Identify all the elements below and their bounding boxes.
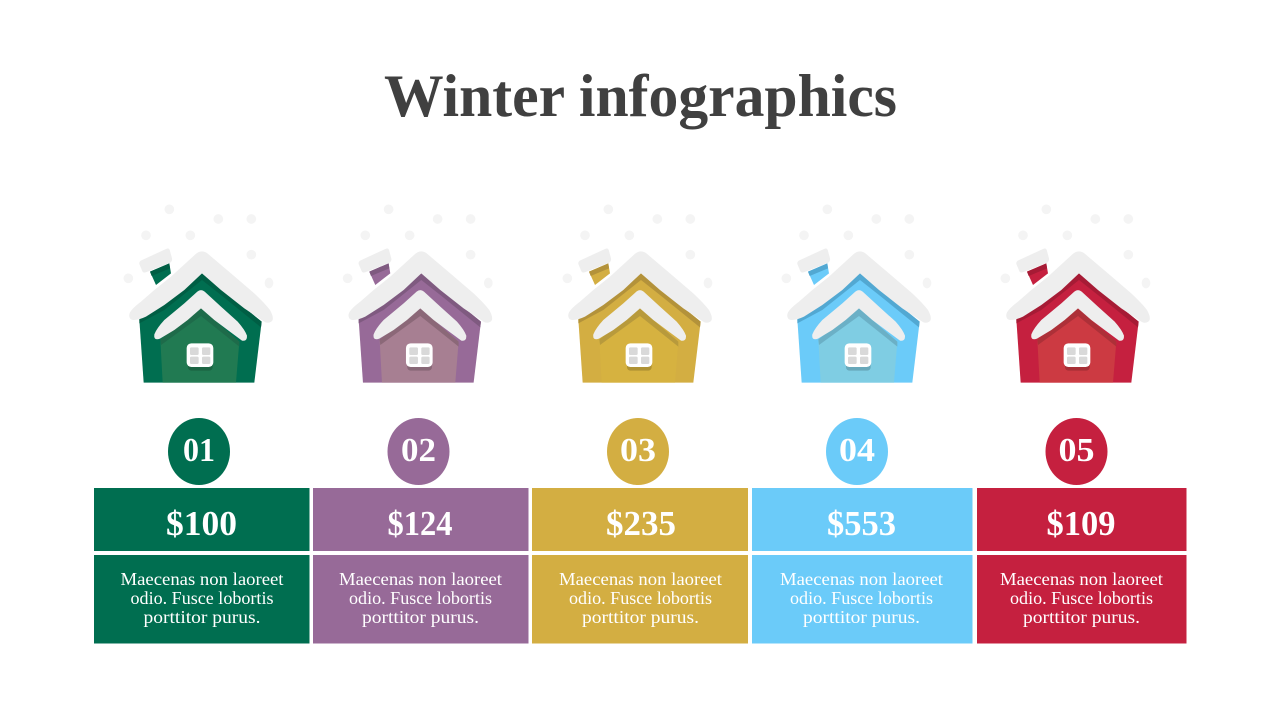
- description box 04: Maecenas non laoreet: [780, 569, 943, 589]
- price box $100: [94, 488, 310, 551]
- description box 04: odio. Fusce lobortis: [790, 588, 933, 608]
- number badge 01: [168, 418, 230, 485]
- panel: item 05: [977, 204, 1186, 644]
- number badge 05: [1046, 418, 1108, 485]
- number badge 04: [826, 418, 888, 485]
- price box $235: [532, 488, 748, 551]
- panel: item 04: [752, 204, 972, 644]
- number badge 04: 04: [839, 432, 875, 469]
- number badge 03: [607, 418, 669, 485]
- description box 04: porttitor purus.: [803, 607, 920, 627]
- description box 05: porttitor purus.: [1023, 607, 1140, 627]
- panel: item 01: [94, 204, 310, 644]
- icon: blue snowy house: [781, 204, 931, 383]
- price box $124: [313, 488, 528, 551]
- description box 05: [977, 555, 1186, 644]
- number badge 02: 02: [401, 432, 436, 469]
- description box 02: porttitor purus.: [362, 607, 479, 627]
- number badge 02: [388, 418, 450, 485]
- description box 02: [313, 555, 528, 644]
- number badge 03: 03: [620, 432, 656, 469]
- description box 01: odio. Fusce lobortis: [130, 588, 274, 608]
- icon: purple snowy house: [343, 204, 493, 383]
- panel: item 03: [532, 204, 748, 644]
- icon: red snowy house: [1000, 204, 1150, 383]
- description box 01: Maecenas non laoreet: [120, 569, 284, 589]
- description box 03: odio. Fusce lobortis: [569, 588, 712, 608]
- number badge 05: 05: [1058, 432, 1094, 469]
- price box $235: $235: [606, 504, 676, 543]
- price box $124: $124: [388, 504, 452, 543]
- icon: gold snowy house: [562, 204, 712, 383]
- description box 03: porttitor purus.: [582, 607, 699, 627]
- description box 03: Maecenas non laoreet: [559, 569, 722, 589]
- number badge 01: 01: [183, 432, 215, 469]
- description box 02: Maecenas non laoreet: [339, 569, 502, 589]
- price box $109: $109: [1046, 504, 1116, 543]
- description box 04: [752, 555, 972, 644]
- icon: green snowy house: [123, 204, 273, 383]
- title: Winter infographics: [384, 63, 897, 129]
- panel: item 02: [313, 204, 528, 644]
- price box $100: $100: [166, 504, 237, 543]
- description box 01: porttitor purus.: [144, 607, 260, 627]
- price box $553: [752, 488, 972, 551]
- description box 05: Maecenas non laoreet: [1000, 569, 1163, 589]
- description box 02: odio. Fusce lobortis: [349, 588, 492, 608]
- description box 05: odio. Fusce lobortis: [1010, 588, 1153, 608]
- description box 03: [532, 555, 748, 644]
- price box $109: [977, 488, 1186, 551]
- price box $553: $553: [827, 504, 896, 543]
- description box 01: [94, 555, 310, 644]
